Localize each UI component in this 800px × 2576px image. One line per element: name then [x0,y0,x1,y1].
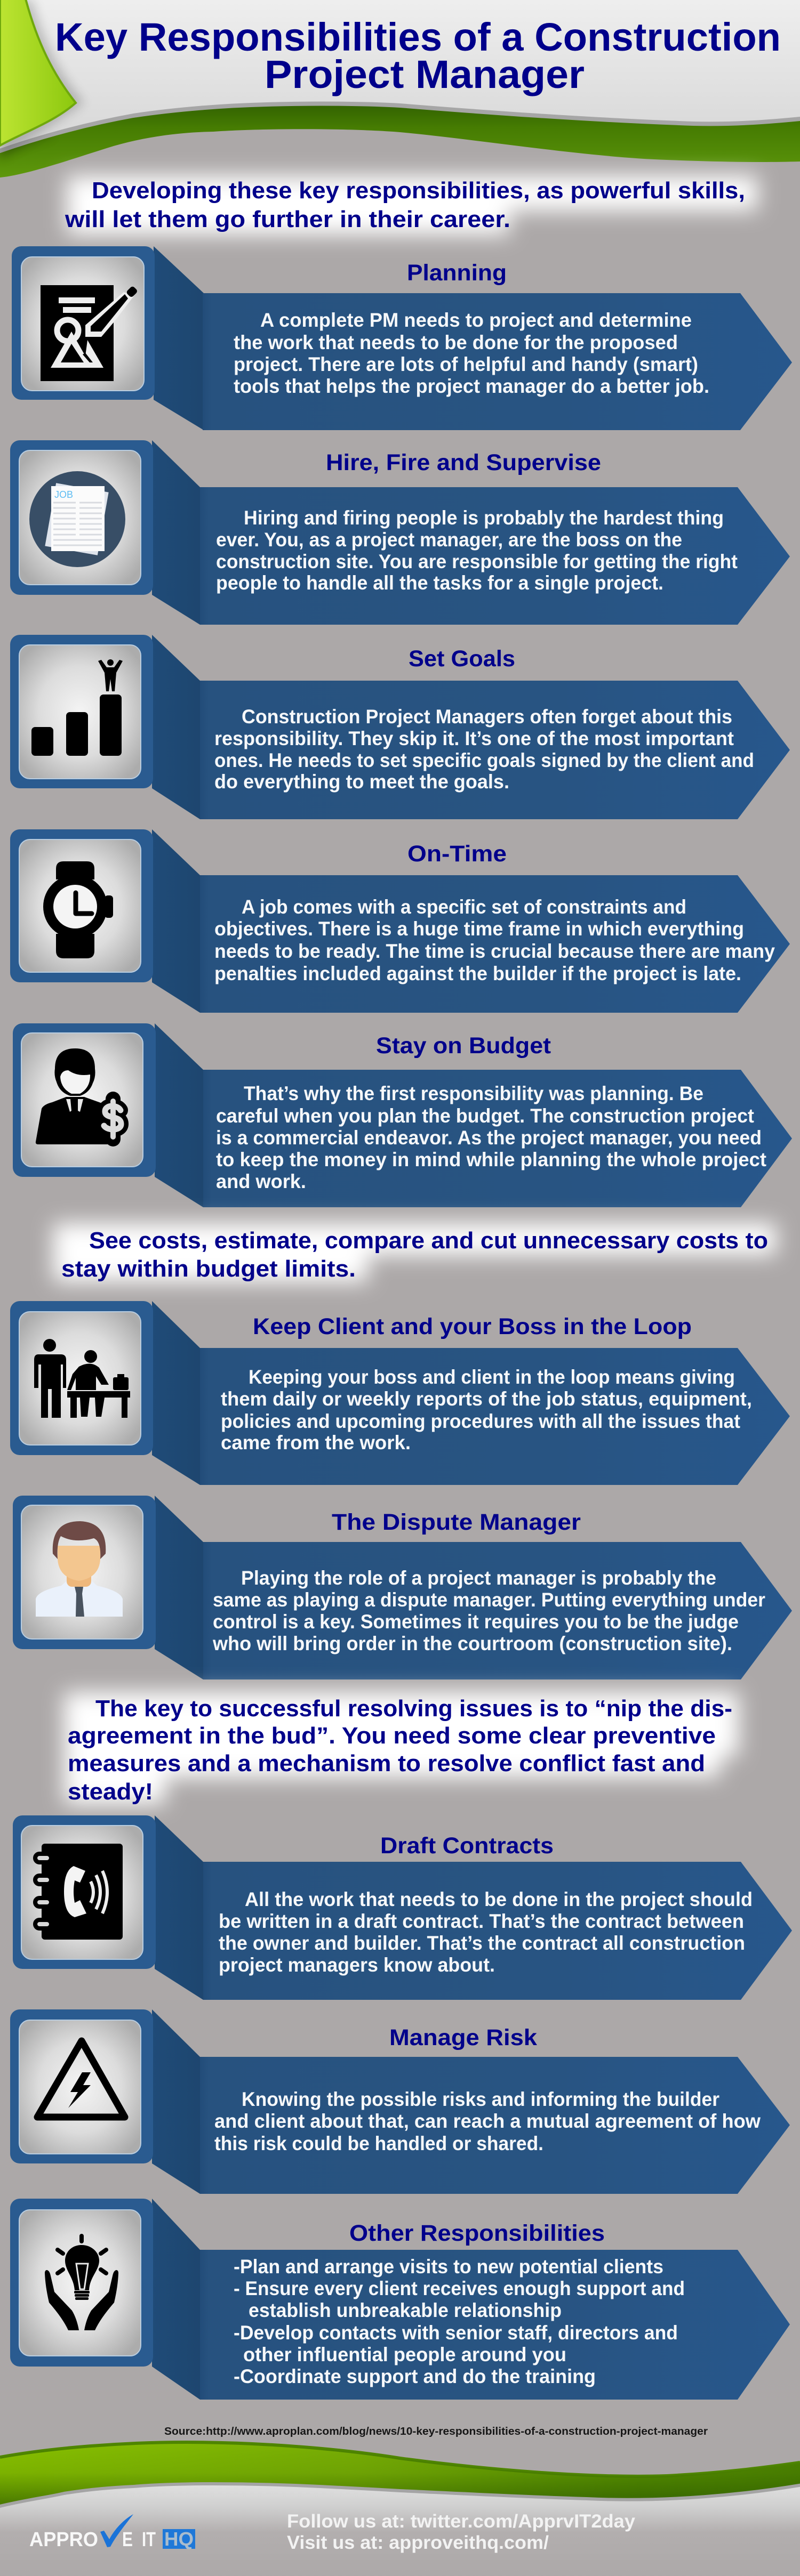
text: keep client body: policies and upcoming procedures with all the issues that [221,1410,740,1432]
text: draft contracts body [219,1888,753,1976]
callout: resolving issues: The key to successful resolving issues is to “nip the dis- [95,1695,732,1722]
text: planning body: tools that helps the project manager do a better job. [234,375,709,397]
list: other responsibilities [234,2256,685,2387]
heading: manage risk: Manage Risk [389,2025,537,2050]
text: dispute body [212,1567,765,1654]
text: manage risk body [214,2088,761,2154]
heading: hire, fire and supervise: Hire, Fire and Supervise [326,450,601,475]
panel: hire, fire and supervise [10,440,790,625]
callout: resolving issues [64,1692,739,1805]
text: keep client body: them daily or weekly reports of the job status, equipment, [221,1388,752,1410]
text: on-time body: A job comes with a specific set of constraints and [242,896,686,918]
text: set goals body: do everything to meet the goals. [214,771,509,793]
panel: on-time [10,829,790,1013]
callout: intro: Developing these key responsibilities, as powerful skills, [92,177,745,204]
icon: people at a desk [34,1339,130,1418]
title [55,15,781,96]
panel: manage risk [10,2009,790,2194]
callout: resolving issues: steady! [68,1779,153,1805]
heading: the dispute manager: The Dispute Manager [332,1509,581,1535]
text: keep client body [221,1366,752,1453]
logo: approve it hq: IT [142,2529,156,2551]
text: on-time body: penalties included against the builder if the project is late. [214,963,741,984]
icon: light bulb in hands [45,2236,118,2330]
callout: intro [65,176,757,235]
list: other responsibilities: -Coordinate support and do the training [234,2365,596,2387]
footer links: Follow us at: twitter.com/ApprvIT2day [287,2511,636,2532]
title: Project Manager [265,52,585,96]
text: dispute body: same as playing a dispute manager. Putting everything under [213,1589,765,1611]
callout: costs: See costs, estimate, compare and cut unnecessary costs to [89,1228,768,1254]
text: budget body: to keep the money in mind while planning the whole project [216,1149,766,1170]
callout: intro: will let them go further in their career. [65,206,510,232]
text: budget body: That’s why the first responsibility was planning. Be [244,1083,703,1104]
text: planning body: A complete PM needs to project and determine [260,309,692,331]
source line: Source:http://www.aproplan.com/blog/news/10-key-responsibilities-of-a-construction-project-manager [164,2426,708,2437]
text: keep client body: Keeping your boss and client in the loop means giving [249,1366,735,1388]
text: budget body: is a commercial endeavor. As the project manager, you need [216,1127,762,1149]
text: set goals body: responsibility. They skip it. It’s one of the most important [214,728,734,749]
icon: manager with dollar [36,1048,121,1144]
text: keep client body: came from the work. [221,1432,411,1453]
text: planning body [234,309,709,397]
panel: keep client and boss in the loop [10,1301,790,1485]
panel: planning [12,246,792,430]
text: hire body: people to handle all the tasks for a single project. [216,572,663,594]
text: set goals body [214,706,754,793]
icon: warning triangle with bolt [37,2041,125,2117]
text: dispute body: Playing the role of a project manager is probably the [241,1567,716,1589]
panel: set goals [10,635,790,819]
list: other responsibilities: establish unbreakable relationship [249,2299,562,2321]
icon: job documents [29,471,125,567]
text: budget body: careful when you plan the budget. The construction project [216,1105,754,1127]
text: dispute body: control is a key. Sometimes it requires you to be the judge [213,1611,739,1633]
footer links: Visit us at: approveithq.com/ [287,2532,549,2553]
text: hire body: construction site. You are responsible for getting the right [216,551,738,572]
icon: manager portrait [36,1521,123,1617]
list: other responsibilities: - Ensure every client receives enough support and [234,2278,685,2299]
text: on-time body: needs to be ready. The time is crucial because there are many [214,940,775,962]
text: set goals body: ones. He needs to set specific goals signed by the client and [214,749,754,771]
icon: address book with phone [35,1844,123,1940]
text: draft contracts body: project managers know about. [219,1954,495,1976]
footer links [287,2511,636,2553]
callout: resolving issues: measures and a mechanism to resolve conflict fast and [68,1750,705,1776]
icon: planning sheet and pencil [41,285,138,381]
text: planning body: project. There are lots of helpful and handy (smart) [234,353,698,375]
text: budget body [216,1083,766,1192]
text: hire body: Hiring and firing people is probably the hardest thing [244,507,724,529]
text: set goals body: Construction Project Managers often forget about this [242,706,732,728]
text: dispute body: who will bring order in the courtroom (construction site). [212,1633,732,1654]
logo: approve it hq: HQ [164,2528,194,2550]
text: draft contracts body: be written in a draft contract. That’s the contract between [219,1910,744,1932]
panel: stay on budget [13,1023,792,1207]
heading: other responsibilities: Other Responsibilities [349,2220,605,2246]
panel: draft contracts [13,1815,792,2000]
header band [0,0,800,177]
heading: keep client: Keep Client and your Boss in the Loop [253,1314,692,1339]
text: budget body: and work. [216,1170,306,1192]
text: draft contracts body: the owner and builder. That’s the contract all construction [219,1932,745,1954]
text: manage risk body: and client about that, can reach a mutual agreement of how [214,2110,761,2132]
heading: set goals: Set Goals [409,646,515,672]
callout: resolving issues: agreement in the bud”. You need some clear preventive [68,1723,716,1749]
heading: planning: Planning [407,260,507,286]
text: hire body: ever. You, as a project manager, are the boss on the [216,529,682,551]
list: other responsibilities: -Plan and arrange visits to new potential clients [234,2256,663,2278]
logo: approve it hq [29,2514,195,2551]
callout: costs: stay within budget limits. [61,1256,356,1282]
logo: approve it hq: E [122,2529,133,2551]
heading: on-time: On-Time [407,841,507,867]
text: on-time body: objectives. There is a huge time frame in which everything [214,918,744,940]
text: manage risk body: this risk could be handled or shared. [214,2133,543,2154]
callout: costs [53,1223,776,1282]
text: on-time body [214,896,775,984]
title: Key Responsibilities of a Construction [55,15,781,59]
list: other responsibilities: other influential people around you [243,2344,566,2365]
panel: other responsibilities [10,2199,790,2400]
icon: job documents: JOB [54,489,73,500]
footer band [0,2442,800,2576]
icon: rising bars with person [31,659,123,756]
panel: the dispute manager [13,1496,792,1679]
heading: draft contracts: Draft Contracts [380,1833,554,1859]
heading: stay on budget: Stay on Budget [376,1033,551,1059]
text: hire body [216,507,738,594]
icon: wrist watch [43,861,113,958]
list: other responsibilities: -Develop contacts with senior staff, directors and [234,2322,678,2344]
text: draft contracts body: All the work that needs to be done in the project should [245,1888,753,1910]
text: manage risk body: Knowing the possible risks and informing the builder [242,2088,719,2110]
logo: approve it hq: APPRO [29,2529,98,2551]
text: planning body: the work that needs to be done for the proposed [234,332,678,353]
